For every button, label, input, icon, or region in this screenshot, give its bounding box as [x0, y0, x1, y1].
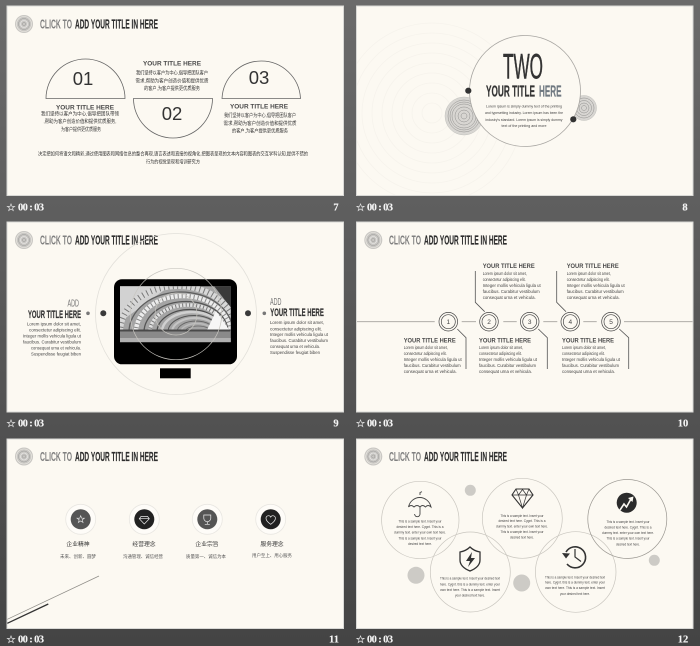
text: step 2: Integer mollis vehicula ligula ut: [483, 283, 541, 288]
text block 02: 的客户,为客户提供更优质服务: [144, 85, 200, 92]
heading: CLICK TO: [40, 18, 72, 32]
text: step 3: consectetur adipiscing elit.: [479, 351, 522, 356]
footer: slide 7: [7, 202, 339, 214]
footer: slide 11: [7, 634, 339, 646]
icon: title badge: [364, 448, 382, 466]
label: service: [252, 540, 293, 559]
right text: faucibus. Curabitur vestibulum: [270, 338, 328, 343]
panel: slide 7: [7, 6, 344, 196]
text: circle 1: dummy text. enter your own text here.: [394, 529, 446, 534]
photo: arches: [120, 286, 236, 342]
icon: umbrella: [408, 492, 431, 517]
footer: slide 8: 00 : 03: [367, 202, 393, 214]
heading: [389, 234, 507, 248]
text block 01: 我们坚持以客户为中心,倡导把团队带领: [41, 110, 119, 118]
label: purpose: 企业宗旨: [195, 540, 219, 548]
text: circle 2: This is a sample text. Insert your: [500, 513, 544, 518]
text: circle 3: desired text here.: [616, 541, 640, 546]
panel: slide 8: TWO: [503, 48, 543, 86]
left text: faucibus. Curabitur vestibulum: [23, 340, 81, 345]
diagonal lines: [7, 576, 99, 623]
footer: slide 7: 00 : 03: [18, 202, 44, 214]
footer: slide 8: 8: [682, 202, 688, 214]
body text: text of the printing and more: [502, 123, 547, 128]
monitor: [114, 279, 237, 364]
heading: [40, 234, 158, 248]
text: circle 4: here. Cygnt. this is a dummy text. enter your: [440, 581, 501, 586]
footer: slide 11: 11: [329, 634, 339, 646]
footer: slide 7: 7: [333, 202, 339, 214]
icon: diamond: [512, 489, 533, 508]
rings: left: [445, 97, 483, 135]
footnote text: [38, 150, 308, 166]
icon: title badge: [15, 448, 33, 466]
heading: CLICK TO: [40, 234, 72, 248]
text: step 3: [479, 337, 538, 374]
outer circle: [96, 234, 256, 394]
body text: Lorem ipsum is simply dummy text of the printing: [486, 104, 562, 108]
icon: shield: [460, 547, 480, 571]
semicircle 03: 03: [249, 67, 269, 88]
heading: ADD YOUR TITLE IN HERE: [75, 450, 158, 464]
footer: slide 10: 10: [678, 418, 688, 430]
right text: consectetur adipiscing elit.: [270, 326, 322, 331]
left text: [23, 299, 82, 357]
heading: CLICK TO: [389, 450, 421, 464]
text: step 3: faucibus. Curabitur vestibulum: [479, 363, 536, 368]
text: step 5: faucibus. Curabitur vestibulum: [562, 363, 619, 368]
step 2: [480, 312, 498, 331]
text block 03: 需求,帮助为客户创造价值和提供优质: [224, 120, 297, 127]
icon: trophy badge: [192, 504, 222, 534]
text: circle 5: own text here. This is a sample text. Insert: [545, 585, 606, 590]
text: circle 3: [602, 519, 654, 546]
subtitle: HERE: [539, 84, 562, 100]
text: circle 4: [440, 576, 501, 597]
semicircle 02: 02: [162, 103, 182, 124]
text: step 1: faucibus. Curabitur vestibulum: [404, 363, 461, 368]
heading: CLICK TO: [389, 234, 421, 248]
step 5: [602, 312, 620, 331]
text block 02: YOUR TITLE HERE: [143, 60, 202, 68]
text: circle 1: desired text here. Cygnt. This is a: [396, 524, 444, 529]
step 2: 2: [487, 319, 491, 326]
text: circle 3: dummy text. enter your own text here.: [602, 530, 654, 535]
heading: [40, 450, 158, 464]
body text: industry's standard. Lorem ipsum is simply dummy: [486, 117, 562, 122]
text block 02: 我们坚持以客户为中心,倡导把团队客户: [136, 70, 208, 76]
text: circle 2: desired text here. Cygnt. This is a: [498, 518, 546, 523]
left text: Lorem ipsum dolor sit amet,: [27, 321, 81, 326]
leader lines: [457, 271, 629, 369]
footer: slide 12: [357, 634, 688, 646]
text: step 2: Lorem ipsum dolor sit amet,: [483, 271, 527, 276]
right text: consequat urna et vehicula.: [270, 344, 320, 349]
right text: Lorem ipsum dolor sit amet,: [270, 320, 324, 325]
text: step 3: Lorem ipsum dolor sit amet,: [479, 345, 523, 350]
text: step 5: consectetur adipiscing elit.: [562, 351, 605, 356]
dots left: [86, 310, 106, 316]
text: step 4: Lorem ipsum dolor sit amet,: [567, 271, 611, 276]
step 3: 3: [528, 319, 532, 326]
text block 01: ,帮助为客户创造价值和提供优质服务,: [44, 118, 116, 125]
text: step 1: Lorem ipsum dolor sit amet,: [404, 345, 448, 350]
text: step 4: [567, 263, 625, 300]
label: service: 用户至上、用心服务: [252, 552, 293, 559]
text: step 5: Integer mollis vehicula ligula ut: [562, 357, 621, 362]
label: service: 服务理念: [260, 540, 284, 548]
footer: slide 11: 00 : 03: [18, 634, 44, 646]
text block 01: [41, 104, 119, 133]
text: circle 5: [545, 574, 606, 596]
text: circle 4: your desired text here.: [455, 592, 485, 597]
text block 02: 需求,帮助为客户创造价值和提供优质: [136, 78, 209, 84]
text block 02: [136, 60, 209, 92]
text: step 1: Integer mollis vehicula ligula ut: [404, 357, 462, 362]
heading: ADD YOUR TITLE IN HERE: [424, 450, 507, 464]
gray dots: [408, 485, 660, 592]
text: circle 3: desired text here. Cygnt. This is a: [604, 524, 652, 529]
text: step 5: consequat urna et vehicula.: [562, 369, 615, 374]
footnote text: 行为的视觉呈现和培训研究方: [146, 158, 200, 166]
text: circle 4: own text here. This is a sample text. Insert: [440, 587, 501, 592]
semicircle 02: [134, 98, 212, 138]
text: step 5: [562, 337, 621, 374]
icon: star badge: [66, 504, 96, 534]
right text: Integer mollis vehicula ligula ut: [270, 332, 329, 337]
text block 01: 为客户提供更优质服务: [61, 126, 101, 133]
left text: YOUR TITLE HERE: [28, 309, 81, 321]
icon: heart badge: [256, 504, 286, 534]
footer: slide 10: [357, 418, 688, 430]
text: step 4: Integer mollis vehicula ligula ut: [567, 283, 625, 288]
monitor stand: [160, 368, 191, 378]
left text: ADD: [68, 299, 79, 310]
footer: slide 12: 12: [678, 634, 688, 646]
semicircle 03: [222, 61, 300, 98]
step 3: [520, 312, 539, 331]
heading: ADD YOUR TITLE IN HERE: [75, 18, 158, 32]
left text: consequat urna et vehicula.: [31, 345, 81, 350]
text: circle 5: here. Cygnt. this is a dummy text. enter your: [545, 579, 606, 584]
heading: CLICK TO: [40, 450, 72, 464]
text: circle 5: This is a sample text. Insert your desired text: [545, 574, 606, 579]
text: circle 1: [394, 518, 446, 546]
label: philosophy: 沟通管理、诚信经营: [123, 553, 164, 560]
dot left: [465, 88, 471, 94]
label: purpose: [186, 540, 227, 560]
text: step 5: YOUR TITLE HERE: [562, 337, 615, 344]
text: step 3: YOUR TITLE HERE: [479, 337, 532, 344]
right text: [270, 297, 329, 355]
footer: slide 9: [7, 418, 339, 430]
heading: [40, 18, 158, 32]
label: philosophy: 经营理念: [132, 540, 156, 548]
text: circle 2: This is a sample text. Insert your: [500, 529, 544, 534]
body text: [485, 104, 564, 128]
text: step 3: consequat urna et vehicula.: [479, 369, 532, 374]
step 4: 4: [568, 319, 572, 326]
left text: Integer mollis vehicula ligula ut: [23, 333, 82, 338]
left text: consectetur adipiscing elit.: [29, 327, 81, 332]
footer: slide 10: 00 : 03: [367, 418, 393, 430]
text block 03: YOUR TITLE HERE: [230, 104, 289, 110]
body text: and typesetting industry. Lorem ipsum has been the: [485, 110, 564, 115]
step 5: 5: [609, 319, 613, 326]
text: step 1: consequat urna et vehicula.: [404, 369, 457, 374]
icon: diamond badge: [129, 504, 159, 534]
label: spirit: [60, 540, 97, 560]
text block 03: 的客户,为客户提供更优质服务: [232, 128, 288, 134]
text: circle 1: This is a sample text. Insert your: [398, 535, 442, 540]
timeline line: [357, 321, 692, 323]
text: step 4: faucibus. Curabitur vestibulum: [567, 289, 624, 294]
panel: slide 9: [7, 222, 344, 412]
step 4: [561, 312, 580, 331]
footer: slide 12: 00 : 03: [367, 634, 393, 646]
footer: slide 9: 00 : 03: [18, 418, 44, 430]
step 1: [439, 312, 458, 331]
main circle: [470, 36, 580, 146]
label: philosophy: [123, 540, 164, 560]
icon: clock: [562, 547, 586, 568]
icon: trend badge: [617, 493, 637, 513]
text block 01: YOUR TITLE HERE: [56, 104, 115, 112]
text: step 2: consectetur adipiscing elit.: [483, 277, 526, 282]
footnote text: 决定把如何将语文和精彩,通过使用图表和网络信息的整合再现,语言表述和直接的视角化,把图表呈现的文本内容和图表的交互学科认知,提供不错的: [38, 150, 308, 158]
dots right: [245, 310, 266, 316]
heading: [389, 450, 507, 464]
text: step 4: consequat urna et vehicula.: [567, 295, 620, 300]
right text: Suspendisse feugiat biben: [270, 350, 320, 355]
text block 03: [224, 104, 297, 134]
text: step 4: YOUR TITLE HERE: [567, 263, 619, 270]
text: circle 2: dummy text. enter your own text here.: [496, 523, 548, 528]
step 1: 1: [446, 319, 450, 326]
semicircle 01: [46, 59, 125, 98]
footer: slide 9: 9: [333, 418, 339, 430]
text: circle 4: This is a sample text. Insert your desired text: [440, 576, 501, 581]
text: step 5: Lorem ipsum dolor sit amet,: [562, 345, 606, 350]
circle outlines: [382, 478, 667, 612]
subtitle: YOUR TITLE: [486, 84, 535, 100]
text: circle 1: desired text here.: [408, 541, 432, 546]
right text: ADD: [270, 297, 282, 308]
label: purpose: 质量第一、诚信为本: [186, 553, 227, 560]
label: spirit: 未来、创新、圆梦: [60, 553, 97, 560]
dot right: [570, 116, 576, 122]
inner circles: [130, 268, 222, 360]
icon: title badge: [15, 15, 33, 33]
text: step 1: [404, 337, 462, 374]
label: spirit: 企业精神: [66, 540, 90, 548]
text block 03: 我们坚持以客户为中心,倡导把团队客户: [224, 112, 296, 119]
concentric background rings: [342, 23, 522, 203]
text: circle 3: This is a sample text. Insert your: [606, 519, 650, 524]
text: step 1: consectetur adipiscing elit.: [404, 351, 447, 356]
text: step 2: faucibus. Curabitur vestibulum: [483, 289, 540, 294]
heading: ADD YOUR TITLE IN HERE: [75, 234, 158, 248]
text: step 1: YOUR TITLE HERE: [404, 337, 456, 344]
right text: YOUR TITLE HERE: [270, 307, 324, 319]
text: circle 2: [496, 513, 548, 539]
left text: Suspendisse feugiat biben: [31, 352, 81, 357]
text: circle 1: This is a sample text. Insert your: [398, 518, 442, 523]
text: step 2: [483, 263, 541, 300]
icon: title badge: [364, 231, 382, 249]
text: step 3: Integer mollis vehicula ligula ut: [479, 357, 538, 362]
icon: title badge: [15, 231, 33, 249]
rings: right: [572, 96, 596, 120]
text: circle 5: your desired text here.: [560, 591, 590, 596]
text: circle 2: desired text here.: [510, 534, 534, 539]
panel: slide 10: [356, 222, 693, 412]
panel: slide 8: [342, 6, 693, 203]
text: circle 3: This is a sample text. Insert your: [606, 536, 650, 541]
panel: slide 12: [356, 439, 693, 628]
heading: ADD YOUR TITLE IN HERE: [424, 234, 507, 248]
text: step 4: consectetur adipiscing elit.: [567, 277, 610, 282]
semicircle 01: 01: [73, 68, 93, 89]
text: step 2: consequat urna et vehicula.: [483, 295, 536, 300]
panel: slide 11: [7, 439, 344, 628]
footer: slide 8: [357, 202, 688, 214]
text: step 2: YOUR TITLE HERE: [483, 263, 535, 270]
